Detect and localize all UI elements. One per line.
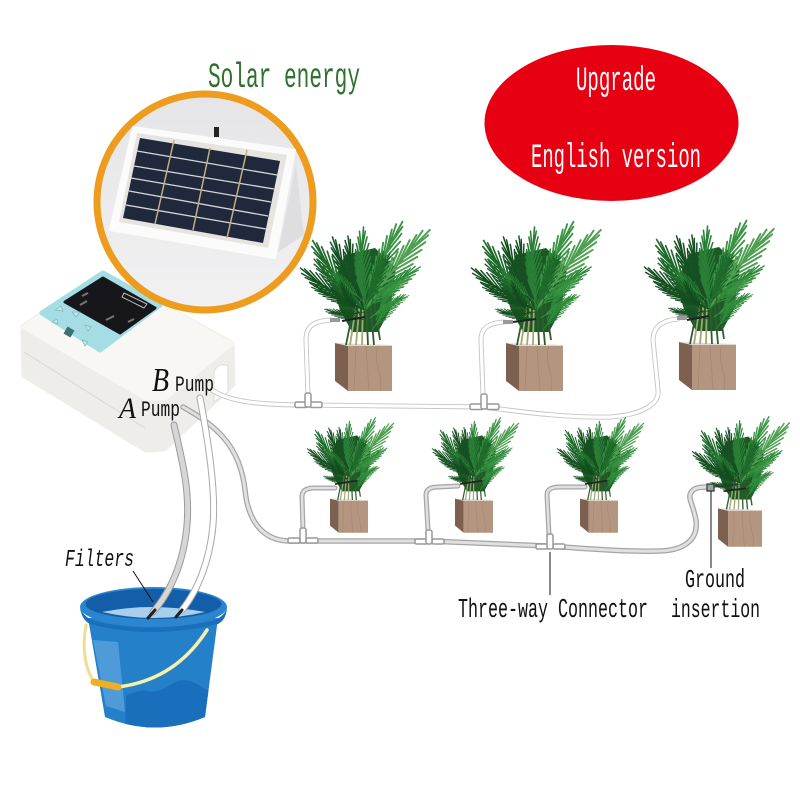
bucket handle [84,625,207,687]
badge: Upgrade English version [484,45,738,201]
foliage 6 [554,415,648,500]
leader line: ground insertion [710,491,712,568]
plant 3 [640,217,780,390]
three-way connectors [288,393,565,549]
plants row 2 [304,414,794,547]
plant 4 [330,499,368,533]
plant 2 [467,218,607,391]
plant 5 [455,499,493,533]
ground insertion stake [707,484,738,491]
device: irrigation controller [24,273,232,449]
label: A Pump [117,392,180,425]
tube: lower water line [183,407,708,551]
label: B Pump: Pump [175,373,214,398]
foliage 4 [304,415,398,500]
leader line: three-way connector [549,552,551,595]
label: A Pump: Pump [141,398,180,423]
leader line: filters [133,571,153,602]
plants row 1 [296,217,780,391]
label: Three-way Connector: Three-way Connector [458,596,648,626]
label: A Pump: A [117,392,137,425]
foliage 7 [689,414,794,509]
tube: pump A to bucket [148,425,188,618]
label: B Pump [152,362,214,399]
plant 6 [580,499,618,533]
plant 7 [718,508,762,547]
tube: pump B to bucket [176,398,214,617]
badge: Upgrade English version: Upgrade [576,63,656,101]
heading: Solar energy: Solar energy [208,58,360,98]
plant 1 [296,218,436,391]
label: B Pump: B [152,362,169,399]
tube: upper water line [212,319,678,417]
foliage 5 [429,415,523,500]
label: Filters: Filters [65,547,134,574]
panel: solar panel in orange circle [97,94,313,310]
bucket [80,587,227,735]
label: Ground: Ground [685,565,745,595]
